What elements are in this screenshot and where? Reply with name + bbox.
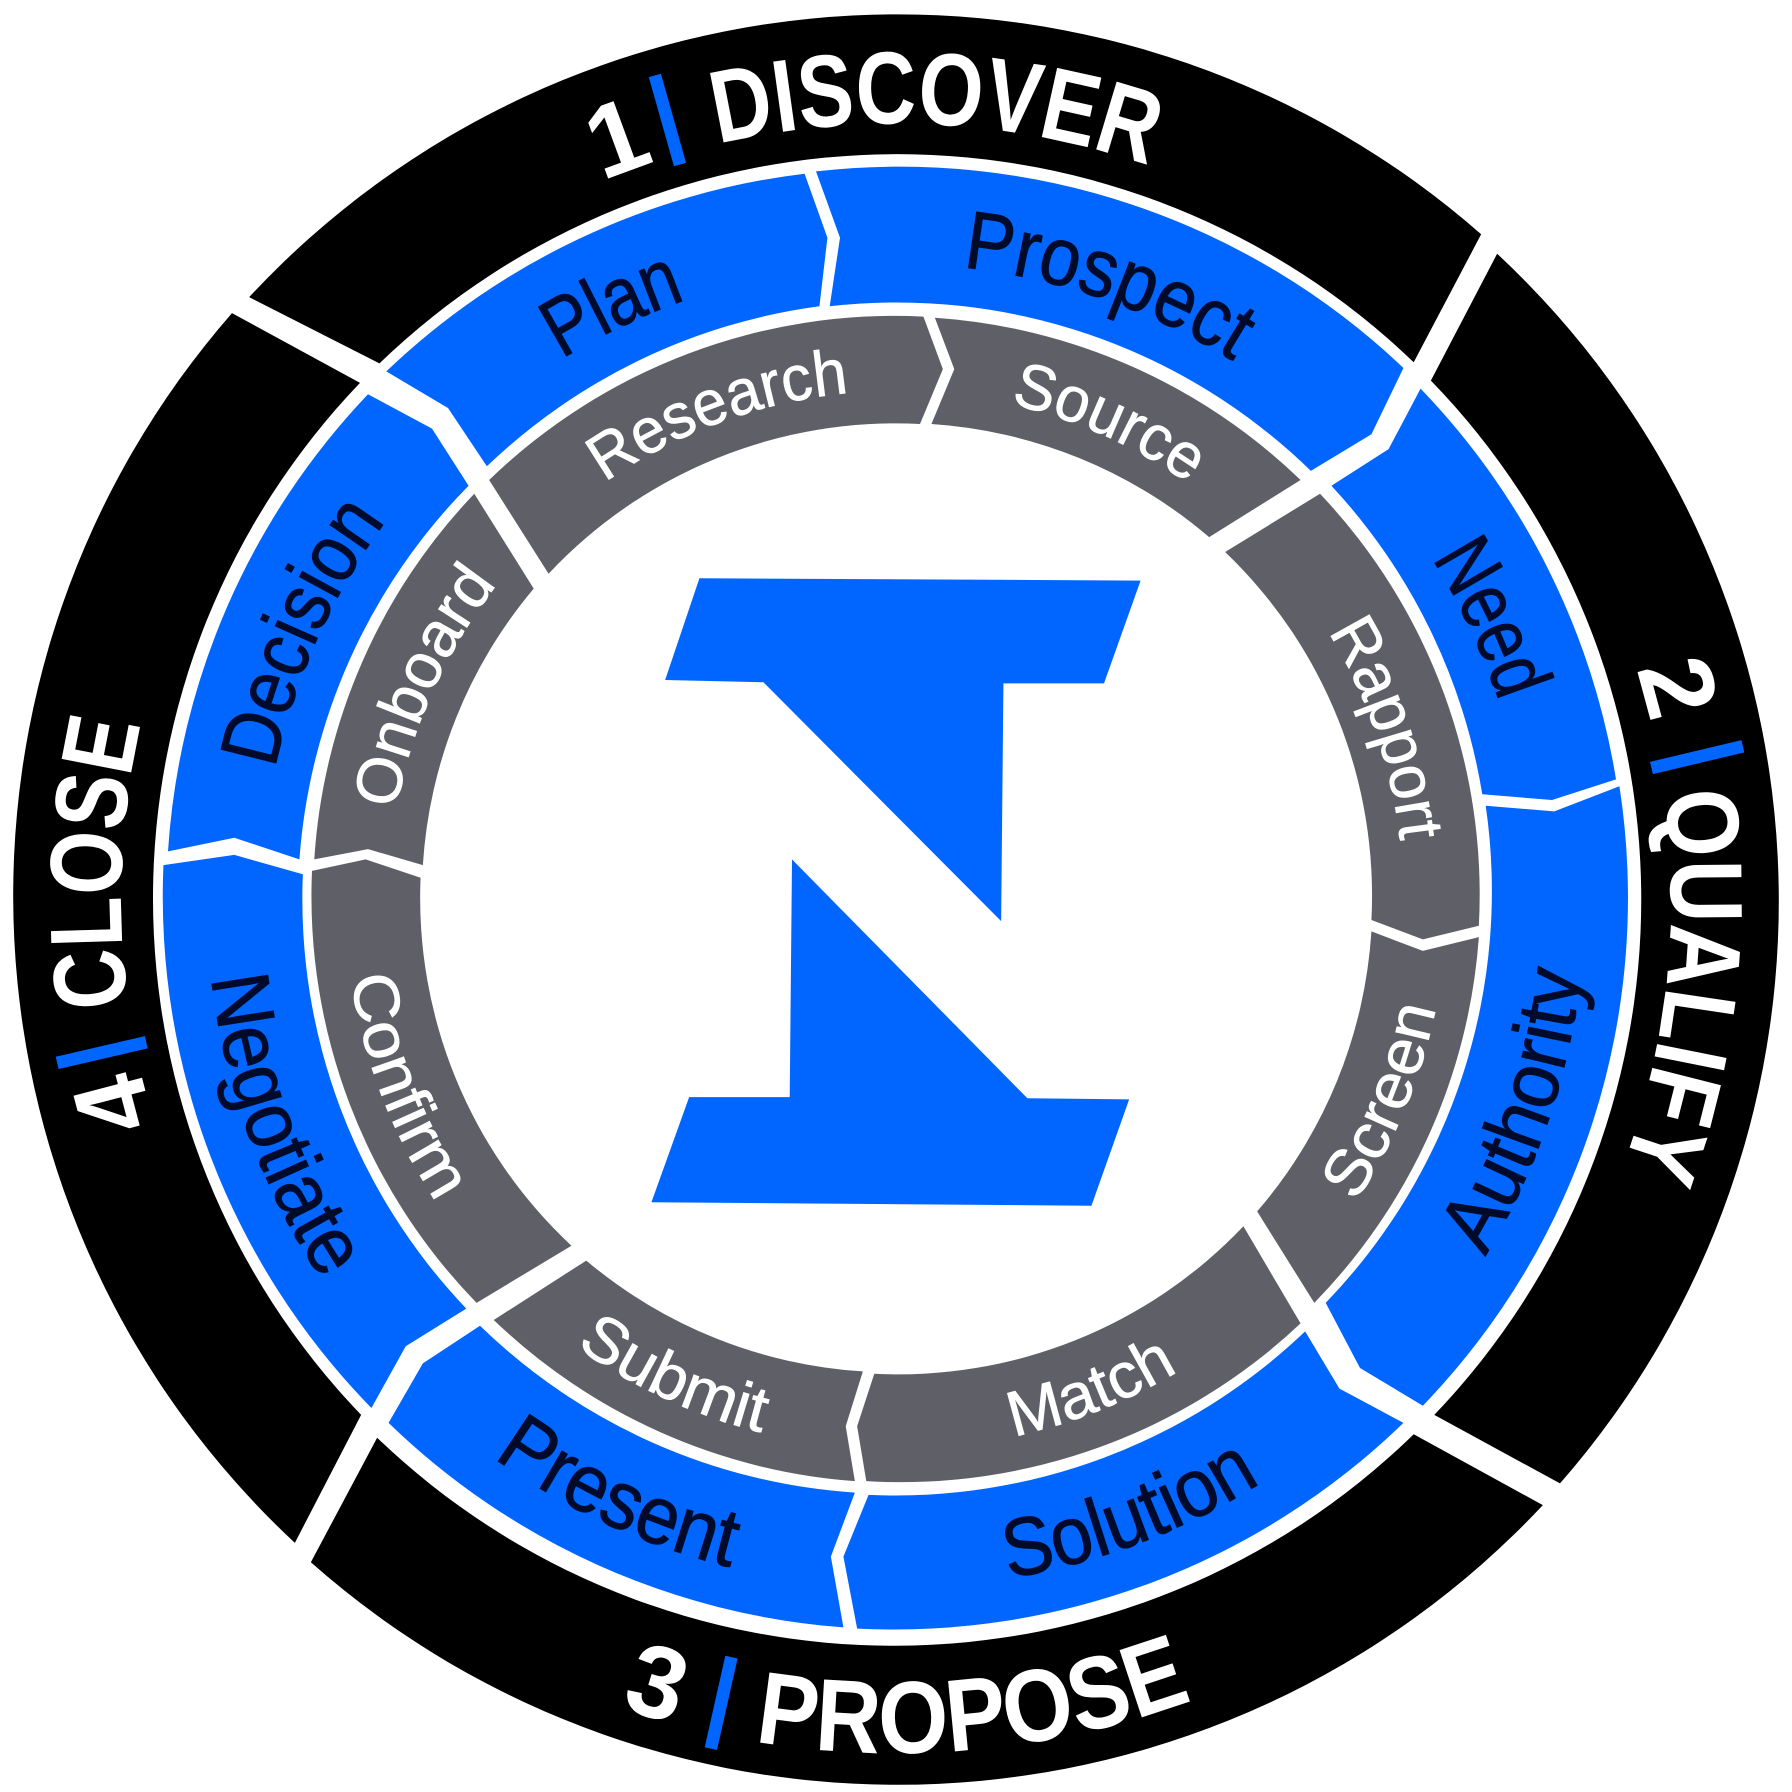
blue segment: Need: Need [1434,534,1555,698]
gray segment: Rapport [1225,494,1480,940]
blue segment: Prospect [816,166,1404,471]
blue segment: Present: Present [498,1414,741,1568]
blue segment: Solution: Solution [1005,1450,1258,1576]
gray segment: Submit [494,1260,863,1482]
gray segment: Source [932,318,1300,538]
outer ring: stage 4 Close [13,313,362,1543]
stage title Close: CLOSE [50,715,140,1006]
blue segment: Plan: Plan [538,262,682,357]
gray segment: Source: Source [1016,364,1200,478]
center logo: stylized N [651,578,1141,1206]
stage title Qualify: QUALIFY [1630,792,1742,1190]
stage number 2: 2 [1638,658,1715,720]
stage number 1: 1 [588,101,654,178]
stage title Propose: PROPOSE [760,1634,1190,1754]
gray segment: Screen [1257,932,1479,1303]
gray segment: Confirm: Confirm [354,976,460,1200]
blue segment: Authority: Authority [1446,966,1595,1258]
gray segment: Onboard [314,494,534,866]
gray segment: Submit: Submit [582,1317,770,1432]
gray segment: Onboard: Onboard [356,560,495,803]
gray segment: Research [489,316,943,574]
gray segment: Rapport: Rapport [1330,614,1441,841]
outer ring: stage 1 Discover [249,14,1482,364]
gray segment: Screen: Screen [1324,1006,1436,1196]
blue segment: Negotiate [162,854,466,1408]
blue segment: Present [388,1326,855,1628]
blue segment: Decision [168,394,468,860]
stage number 4: 4 [74,1072,146,1128]
stage number 3: 3 [627,1646,686,1719]
gray segment: Confirm [311,859,572,1303]
blue segment: Authority [1326,786,1628,1406]
outer ring: stage 2 Qualify [1430,254,1779,1484]
blue segment: Negotiate: Negotiate [211,974,352,1273]
blue divider bar [711,1657,731,1749]
blue segment: Solution [843,1331,1404,1630]
blue divider bar [57,1042,146,1063]
blue segment: Decision: Decision [220,504,384,764]
stage title Discover: DISCOVER [710,52,1160,165]
gray segment: Research: Research [584,349,846,480]
blue segment: Need [1332,388,1616,800]
gray segment: Match: Match [1007,1343,1176,1436]
blue segment: Plan [386,174,828,466]
outer ring: stage 3 Propose [310,1434,1543,1785]
blue segment: Prospect: Prospect [968,211,1256,361]
gray segment: Match [857,1226,1300,1482]
blue divider bar [1651,746,1743,768]
blue divider bar [655,75,680,165]
